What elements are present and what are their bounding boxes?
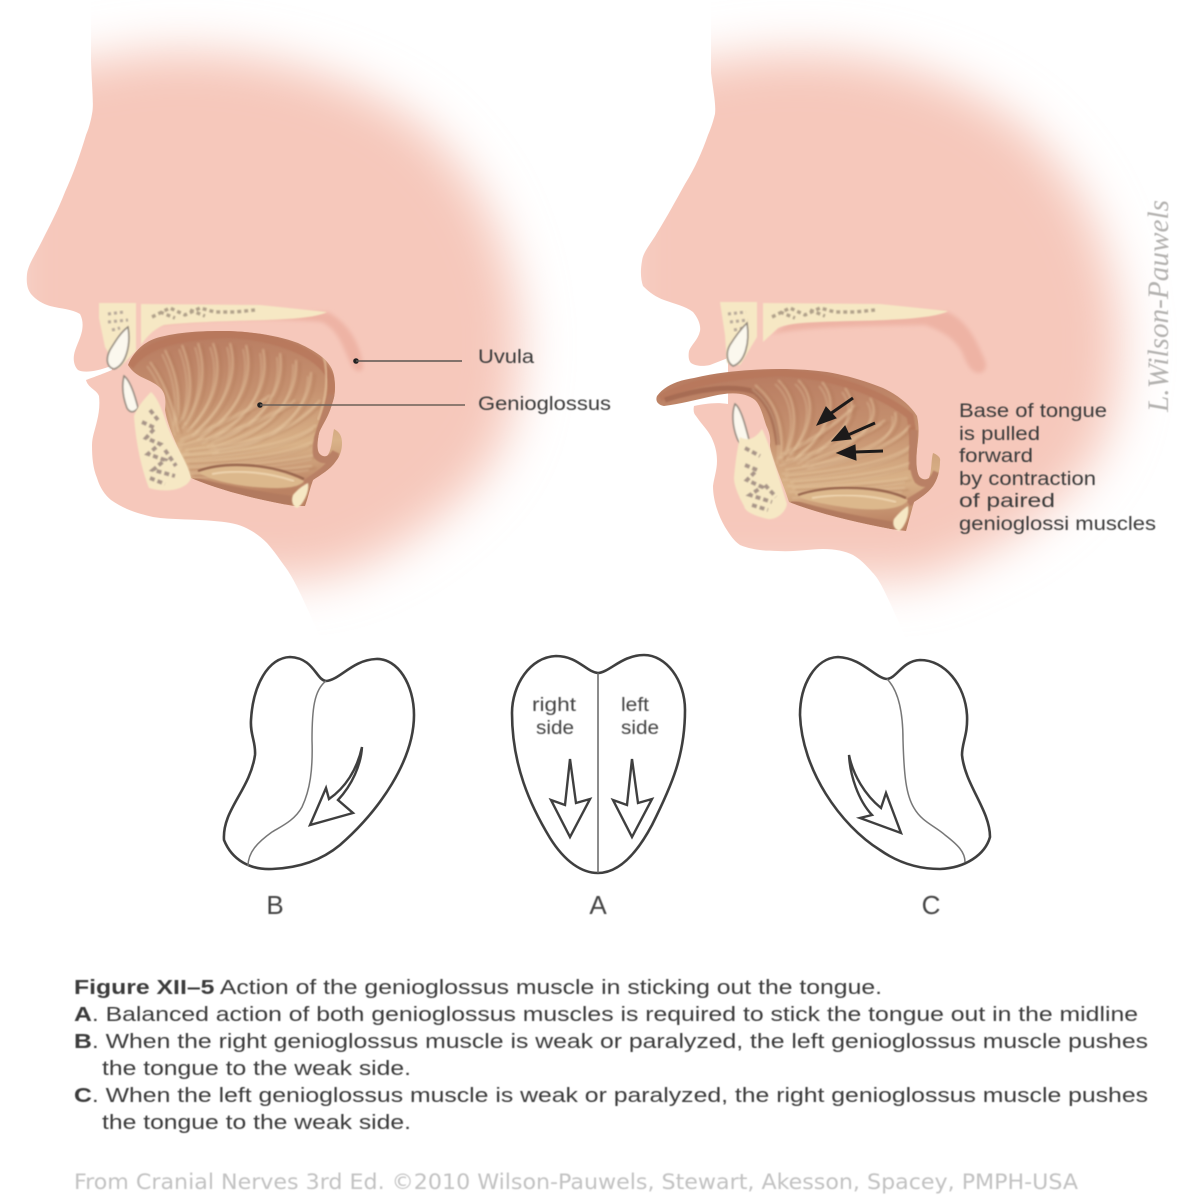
- arrow: right side: [551, 759, 590, 837]
- arrow C: [849, 755, 901, 833]
- label: genioglossus: Genioglossus: [478, 394, 611, 415]
- label line: genioglossus: [257, 402, 465, 408]
- diagram: tongue A midline protrusion: [512, 655, 685, 873]
- caption text block: Figure XII–5 Action of the genioglossus muscle in sticking out the tongue.: [74, 976, 882, 999]
- outline A: [512, 655, 685, 873]
- caption text block: the tongue to the weak side.: [102, 1111, 411, 1134]
- diagram: tongue B deviates to the weak right side: [224, 657, 414, 869]
- panel: left head at rest: [0, 51, 520, 580]
- tongue letter A: A: [589, 890, 607, 920]
- labels: right side / left side: [532, 695, 659, 739]
- panel: right head with tongue out: [613, 53, 1175, 580]
- arrow: left side: [613, 759, 652, 837]
- arrow B: [310, 747, 362, 825]
- maxilla texture: [108, 312, 128, 330]
- midline B: [248, 681, 326, 866]
- upper incisor: [107, 327, 129, 369]
- labels: right side / left side: right: [532, 695, 577, 716]
- diagram: tongue C deviates to the weak left side: [800, 657, 990, 869]
- callout: base of tongue: by contraction: [959, 469, 1096, 490]
- maxilla bone: [720, 302, 757, 365]
- labels: right side / left side: left: [621, 695, 650, 716]
- protruding tongue and genioglossus muscle: [656, 369, 940, 531]
- tongue letter C: C: [922, 890, 940, 920]
- lower incisor: [123, 376, 138, 412]
- hard palate bone: [141, 304, 327, 345]
- caption text block: B. When the right genioglossus muscle is weak or paralyzed, the left genioglossus muscle pushes: [74, 1030, 1148, 1053]
- tongue letter B: B: [266, 890, 284, 920]
- lower arrow: [837, 445, 883, 460]
- callout: base of tongue: genioglossi muscles: [959, 514, 1156, 535]
- hyoid bone: [893, 506, 908, 531]
- label line: uvula: [353, 358, 462, 364]
- callout: base of tongue: of paired: [959, 491, 1055, 512]
- mandible bone: [134, 392, 191, 490]
- midline A: [597, 673, 599, 873]
- callout: base of tongue: Base of tongue: [959, 401, 1107, 422]
- hard palate bone: [763, 303, 948, 342]
- maxilla texture: [728, 312, 748, 330]
- lower incisor: [733, 404, 749, 444]
- head silhouette: [0, 51, 520, 580]
- caption text block: the tongue to the weak side.: [102, 1057, 411, 1080]
- outline B: [224, 657, 414, 869]
- caption text block: [74, 976, 1148, 1134]
- outline C: [800, 657, 990, 869]
- middle arrow: [832, 423, 875, 441]
- tongue and genioglossus muscle: [128, 331, 342, 506]
- maxilla bone: [99, 303, 136, 369]
- mandible bone: [734, 429, 787, 519]
- upper arrow: [817, 398, 853, 425]
- upper incisor: [727, 323, 748, 366]
- source credit: From Cranial Nerves 3rd Ed. ©2010 Wilson-Pauwels, Stewart, Akesson, Spacey, PMPH-USA: [74, 1170, 1079, 1194]
- caption text block: A. Balanced action of both genioglossus muscles is required to stick the tongue out in the midline: [74, 1003, 1138, 1026]
- callout: base of tongue: forward: [959, 446, 1033, 467]
- arrows: forward pull of genioglossi: [817, 398, 883, 460]
- hyoid bone: [292, 483, 308, 508]
- label: uvula: Uvula: [478, 347, 534, 368]
- soft palate: [770, 312, 986, 373]
- callout: base of tongue: is pulled: [959, 424, 1040, 445]
- labels: right side / left side: side: [621, 718, 659, 739]
- signature: L.Wilson-Pauwels: [1142, 200, 1175, 413]
- soft palate and uvula: [150, 312, 363, 371]
- callout: base of tongue: [959, 401, 1156, 535]
- labels: right side / left side: side: [536, 718, 574, 739]
- caption text block: C. When the left genioglossus muscle is weak or paralyzed, the right genioglossus muscle pushes: [74, 1084, 1148, 1107]
- midline C: [887, 679, 965, 862]
- head silhouette: [613, 53, 1120, 580]
